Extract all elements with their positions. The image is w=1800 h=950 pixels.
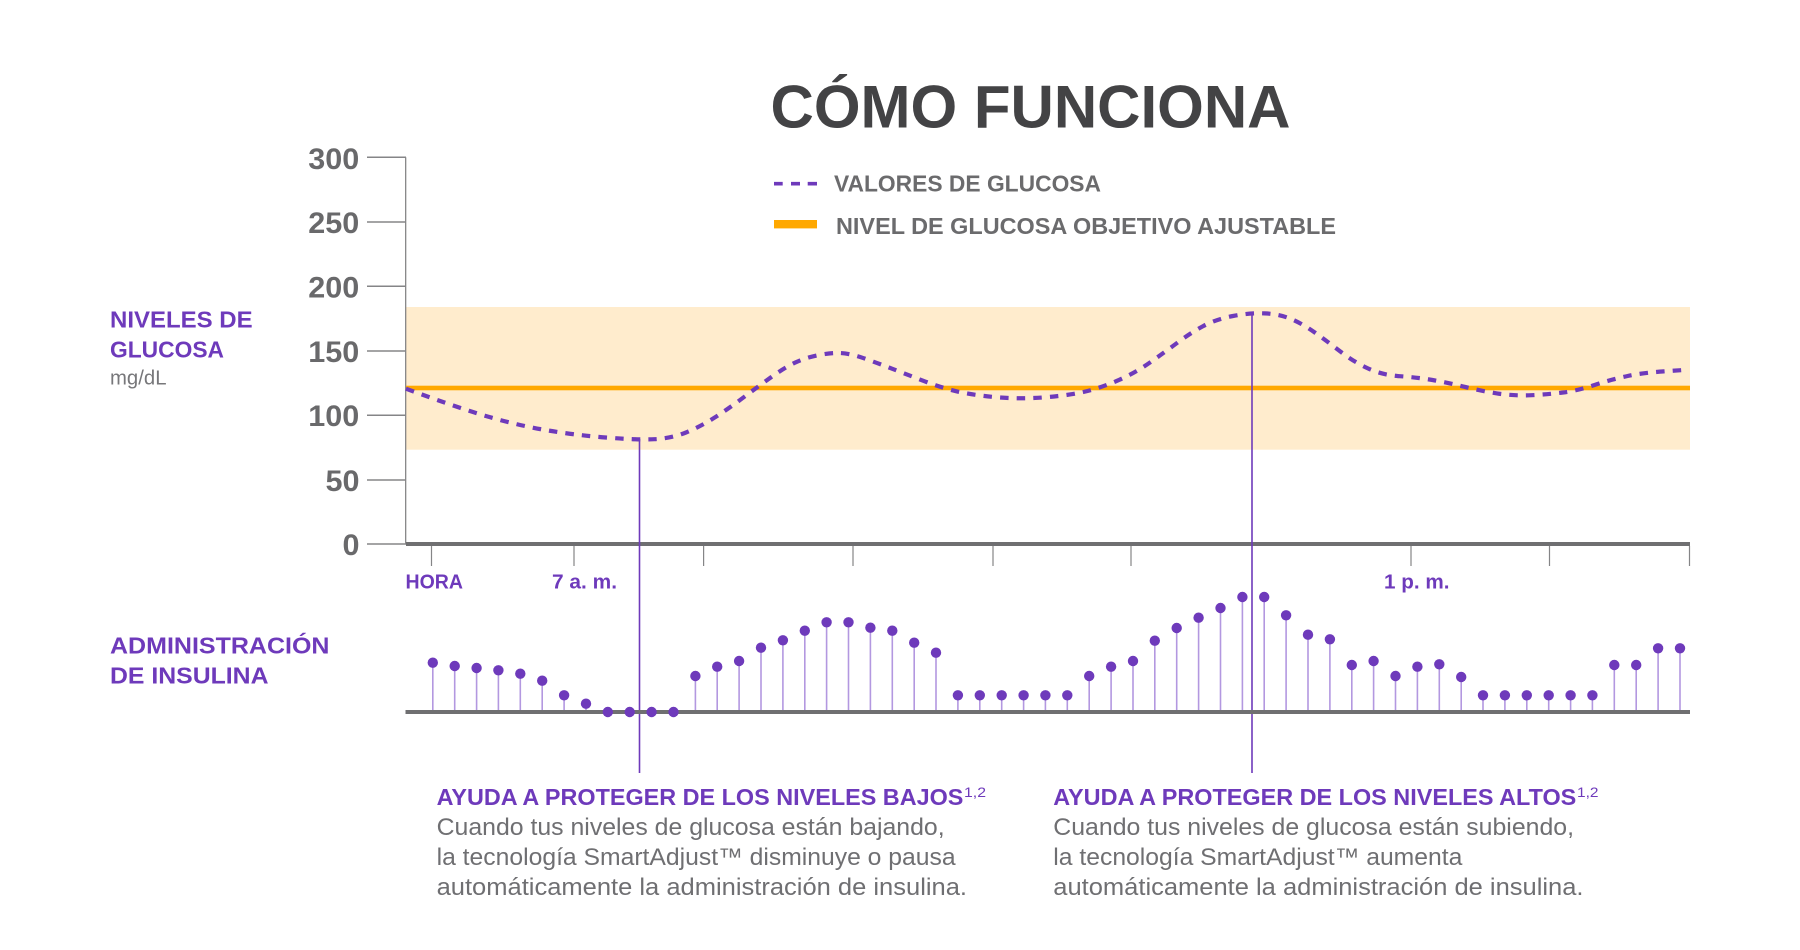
time labels: HORA <box>406 570 463 593</box>
y axis numbers: 50 <box>326 465 360 498</box>
insulin axis label: ADMINISTRACIÓN <box>110 631 330 658</box>
y axis numbers: 150 <box>308 336 359 369</box>
body: high: la tecnología SmartAdjust™ aumenta <box>1053 844 1463 871</box>
body: high: automáticamente la administración de insulina. <box>1053 874 1584 901</box>
title: CÓMO FUNCIONA <box>770 74 1290 141</box>
text block: high glucose protection <box>1053 784 1599 901</box>
insulin axis label: DE INSULINA <box>110 662 269 688</box>
glucose axis label <box>110 307 253 389</box>
target range band <box>406 307 1690 450</box>
callout line: low glucose <box>638 439 640 773</box>
heading: high: AYUDA A PROTEGER DE LOS NIVELES ALTOS <box>1053 784 1576 810</box>
body: low: automáticamente la administración de insulina. <box>437 874 967 901</box>
glucose axis label: GLUCOSA <box>110 337 224 363</box>
legend: target label: NIVEL DE GLUCOSA OBJETIVO AJUSTABLE <box>836 213 1336 239</box>
insulin delivery lollipop chart <box>406 592 1690 717</box>
legend: glucose values label: VALORES DE GLUCOSA <box>834 170 1101 196</box>
text block: low glucose protection <box>437 784 986 901</box>
callout line: high glucose <box>1251 313 1253 773</box>
insulin dots <box>428 592 1685 717</box>
y axis numbers: 250 <box>308 207 359 240</box>
superscript: high: 1,2 <box>1577 784 1599 800</box>
x axis with hour ticks <box>406 542 1690 566</box>
insulin axis label <box>110 631 330 688</box>
insulin stems <box>433 597 1680 710</box>
legend <box>774 170 1336 239</box>
heading: low: AYUDA A PROTEGER DE LOS NIVELES BAJOS <box>437 784 963 810</box>
y axis numbers: 0 <box>342 529 360 562</box>
legend: target swatch <box>774 220 817 228</box>
body: high: Cuando tus niveles de glucosa están subiendo, <box>1053 814 1574 841</box>
time labels: 7 a. m. <box>552 570 617 593</box>
y axis with ticks <box>308 143 406 562</box>
adjustable target line <box>406 386 1690 390</box>
insulin baseline <box>406 710 1690 714</box>
y axis numbers <box>308 143 360 562</box>
glucose axis label: mg/dL <box>110 367 166 389</box>
y axis numbers: 200 <box>308 272 359 305</box>
body: low: la tecnología SmartAdjust™ disminuye o pausa <box>437 844 956 871</box>
glucose axis label: NIVELES DE <box>110 307 253 333</box>
y axis numbers: 300 <box>308 143 359 176</box>
body: high <box>1053 814 1584 901</box>
legend: glucose values dashed swatch <box>774 182 817 185</box>
time labels <box>406 570 1450 593</box>
time labels: 1 p. m. <box>1384 570 1450 593</box>
body: low <box>437 814 967 901</box>
y axis numbers: 100 <box>308 400 359 433</box>
superscript: low: 1,2 <box>964 784 986 800</box>
body: low: Cuando tus niveles de glucosa están bajando, <box>437 814 945 841</box>
glucose curve <box>406 313 1684 439</box>
